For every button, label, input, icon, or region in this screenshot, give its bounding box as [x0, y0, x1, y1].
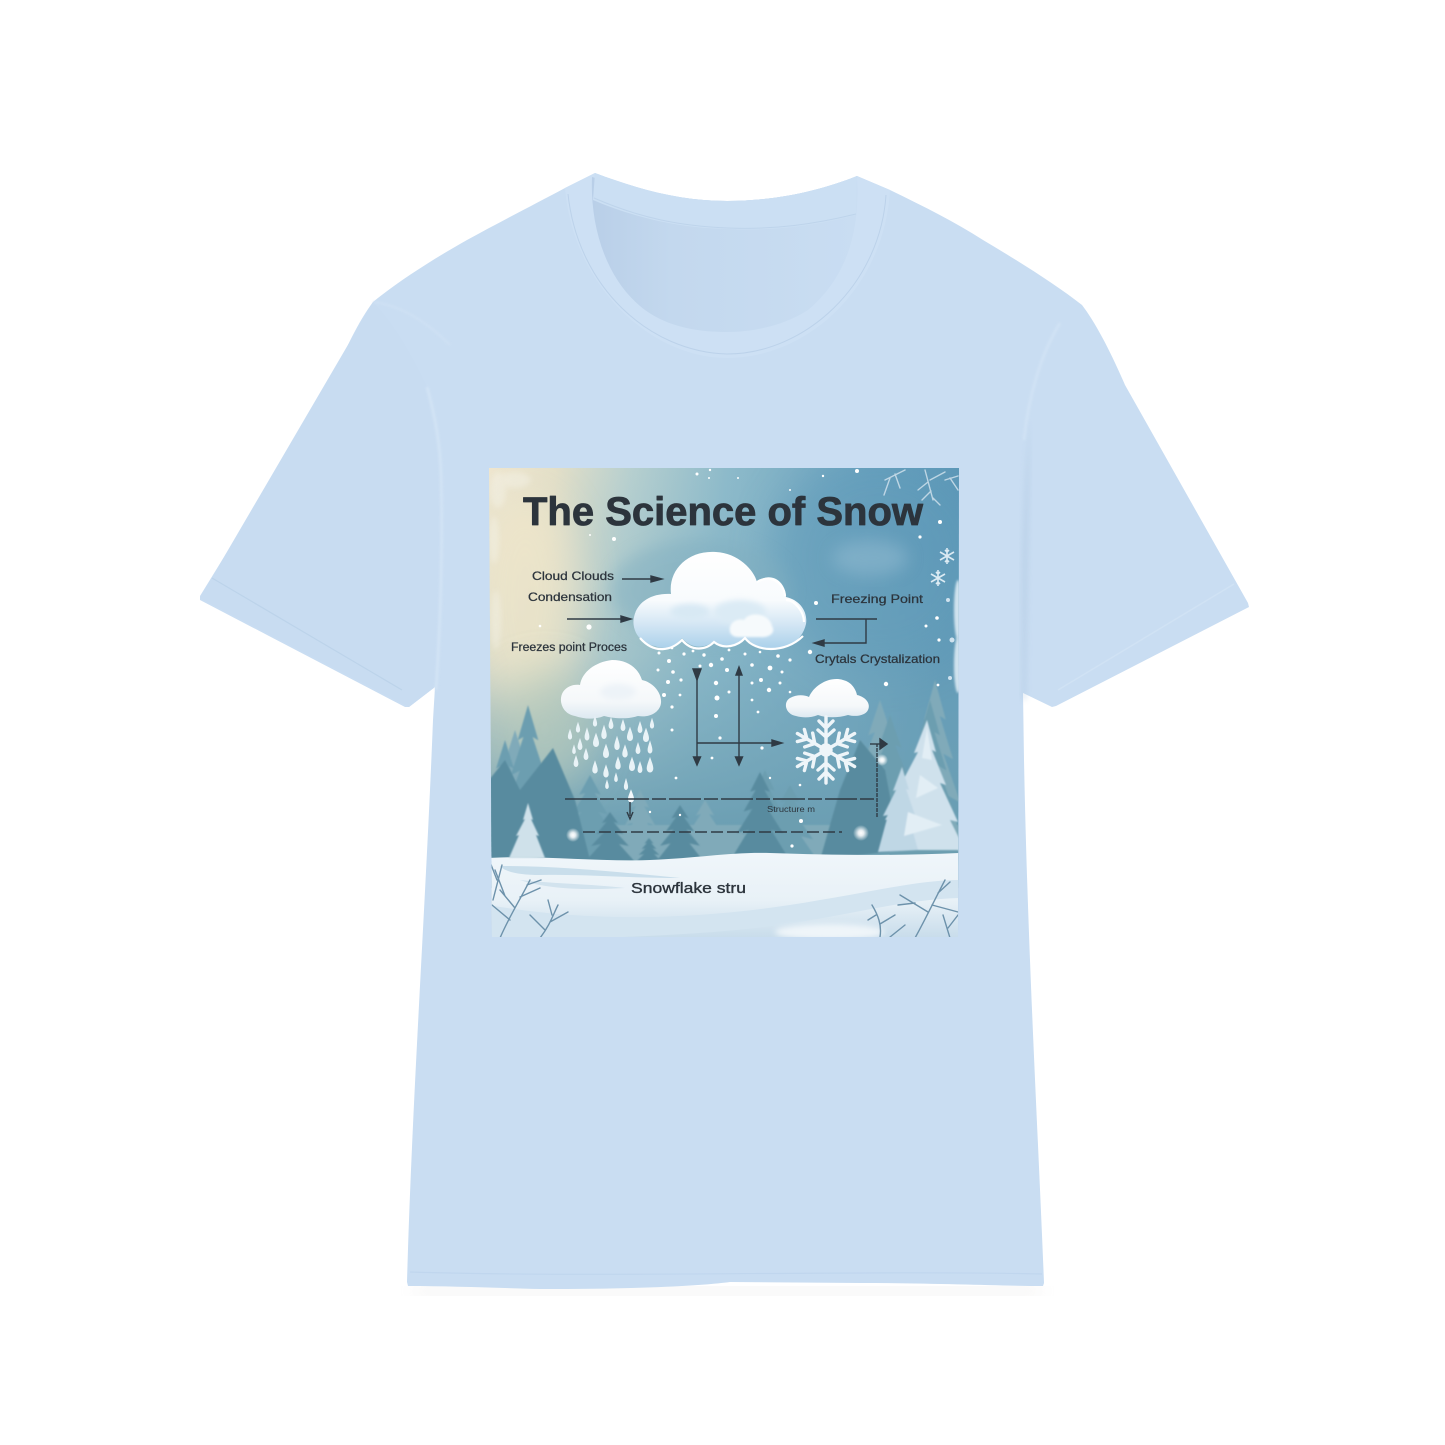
t-shirt	[200, 173, 1249, 1289]
arrow: right vertical	[736, 667, 742, 765]
cloud body	[633, 552, 806, 649]
cloud haze behind big cloud	[607, 543, 704, 624]
rain cloud inner shade	[600, 684, 636, 700]
label: freezes point process: Freezes point Proces	[511, 642, 627, 654]
far forest	[484, 680, 969, 870]
tree snow highlights	[904, 728, 942, 836]
right sleeve seam highlight	[1024, 323, 1060, 440]
white tree right	[878, 720, 965, 852]
near forest	[489, 740, 900, 865]
rain cloud body	[561, 660, 661, 719]
falling drop on dashed line	[628, 789, 634, 802]
label: condensation: Condensation	[528, 590, 612, 604]
white tree left	[509, 803, 545, 858]
label: crystals crystalization: Crytals Crystalization	[815, 652, 940, 666]
shirt drop shadow	[414, 1288, 1042, 1294]
title: The Science of Snow	[523, 490, 924, 534]
arrow: cloud clouds to cloud	[622, 576, 662, 582]
snow shadow band upper	[500, 866, 680, 878]
back collar band	[593, 173, 857, 229]
puff rim highlights	[757, 579, 804, 622]
left body seam highlight	[427, 387, 442, 690]
green haze lower left	[495, 670, 595, 790]
label: structure: Structure m	[767, 805, 815, 814]
snow shadow band lower	[489, 880, 959, 938]
label: cloud clouds: Cloud Clouds	[532, 569, 614, 583]
collar band front	[565, 173, 890, 358]
darker upper right wash	[767, 468, 959, 642]
arrow: freezing point bracket	[814, 619, 877, 646]
left sleeve shading	[200, 302, 441, 707]
large white tree	[884, 720, 958, 851]
pale glow left	[470, 490, 580, 710]
right body seam shadow	[1022, 420, 1030, 700]
scallop outline	[640, 636, 803, 649]
bare branches left	[490, 862, 568, 938]
dashed line upper	[565, 798, 877, 800]
frost edge right	[946, 579, 959, 694]
haze cloud upper right	[832, 540, 908, 576]
left shoulder fold	[373, 302, 450, 345]
inner puff	[730, 614, 773, 637]
left rain cloud	[561, 660, 661, 719]
label: snowflake structure: Snowflake stru	[631, 880, 746, 897]
frost branches top right	[884, 470, 958, 505]
snow mound bottom right	[775, 924, 885, 940]
arrow: structure corner	[870, 739, 887, 817]
snowflake icon	[793, 717, 859, 783]
bare branches right	[868, 880, 958, 938]
arrow: condensation to cloud	[567, 616, 631, 622]
print background gradient	[489, 468, 959, 938]
vertical forest tone	[490, 552, 958, 888]
collar	[565, 173, 890, 358]
front collar stitch lines	[568, 194, 886, 354]
left sleeve hem stitch	[212, 578, 402, 690]
cloud shadow center	[716, 598, 764, 614]
snowy ground	[489, 853, 959, 940]
arrow: to snowflake	[697, 740, 782, 746]
mid forest	[491, 702, 958, 856]
arrow: left vertical	[693, 669, 701, 765]
falling rain drops	[568, 716, 654, 790]
frost edge left	[489, 472, 531, 650]
process arrows	[565, 576, 887, 832]
dashed line lower	[583, 831, 842, 833]
shirt body and sleeves	[200, 173, 1249, 1289]
decorative snow crystals right	[931, 548, 954, 586]
infographic: t-shirt mockup with printed snow science diagram	[200, 173, 1249, 1289]
ground base	[489, 853, 959, 940]
right small cloud	[786, 679, 869, 717]
right sleeve hem stitch	[1058, 584, 1234, 690]
neck opening	[592, 176, 857, 332]
bottom hem stitch	[410, 1272, 1042, 1274]
scattered snow dots	[539, 469, 942, 848]
small white tree beside	[878, 767, 918, 852]
label: freezing point: Freezing Point	[831, 592, 924, 606]
arrow: small down	[627, 802, 633, 819]
back collar stitch lines	[594, 198, 856, 228]
glowing snow orbs	[566, 754, 888, 842]
snow shadow band left	[520, 880, 625, 889]
large central cloud	[633, 552, 806, 649]
cloud shadow left	[672, 602, 709, 616]
printed panel	[489, 468, 959, 937]
